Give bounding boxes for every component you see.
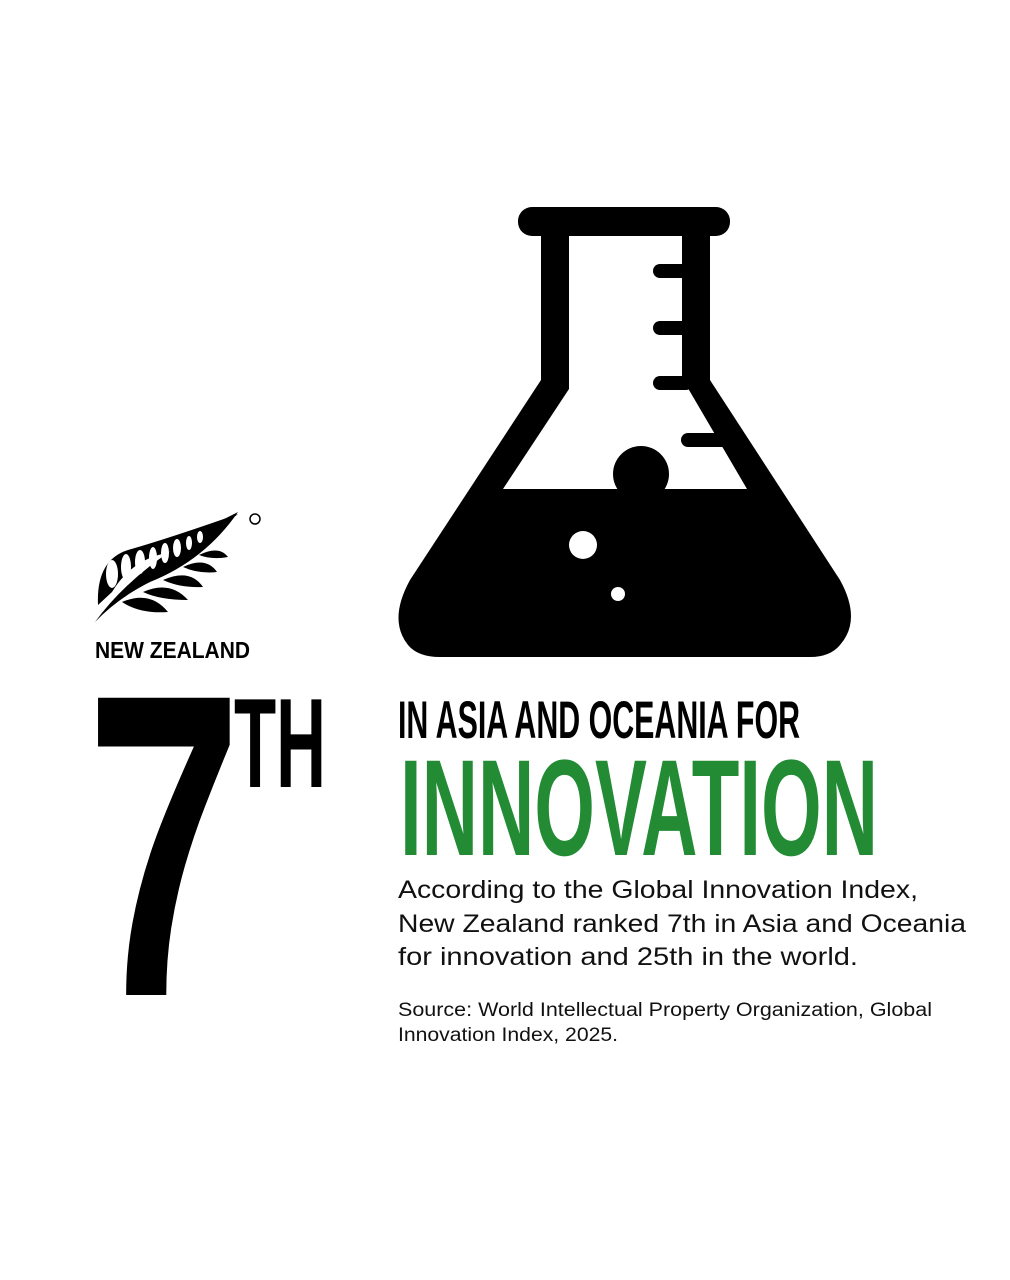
body text: for innovation and 25th in the world. — [398, 943, 858, 971]
logo: New Zealand fern: NEW ZEALAND — [95, 637, 250, 663]
logo: New Zealand fern — [95, 512, 260, 663]
icon: flask — [398, 207, 851, 657]
body text: According to the Global Innovation Index, — [398, 876, 918, 904]
body text: New Zealand ranked 7th in Asia and Oceania — [398, 910, 966, 938]
big rank: 7TH: TH — [234, 672, 326, 814]
body text — [398, 876, 966, 971]
source — [398, 1000, 932, 1046]
source: Source: World Intellectual Property Organization, Global — [398, 1000, 932, 1021]
heading — [398, 691, 878, 885]
big rank: 7TH: 7 — [86, 604, 242, 1087]
source: Innovation Index, 2025. — [398, 1025, 618, 1046]
